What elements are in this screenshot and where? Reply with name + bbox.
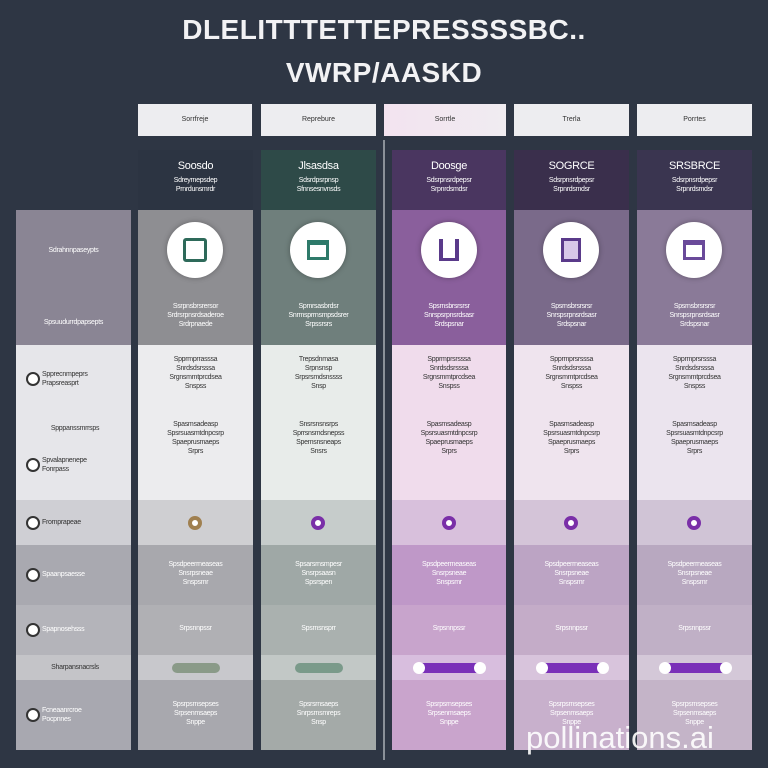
column 5: Srpsnnpssr: [678, 625, 711, 632]
column 2: Sprrsnsmdsnepss: [293, 430, 344, 437]
left label column: Sharpansnacrsls: [51, 664, 99, 671]
column 3: Spaeprusmaeps: [425, 439, 473, 446]
column 2: Snsrpsaasn: [302, 570, 335, 577]
column 5: Snrdsdsrsssa: [675, 365, 714, 372]
column 1: Prnrdunsmrdr: [176, 186, 215, 193]
column 1: Spsrpsrnsepses: [172, 701, 218, 708]
column 1: Srprs: [188, 448, 203, 455]
column 5: Spsdpeerrneaseas: [668, 561, 721, 568]
column header tabs: [138, 104, 752, 136]
column 3: Snspsmr: [436, 579, 462, 586]
column 1: Snppe: [186, 719, 205, 726]
column 3: Srpsnnpssr: [433, 625, 465, 632]
left label column: Spppanssmrrsps: [51, 425, 99, 432]
column 3: Spsrpsrnsepses: [426, 701, 472, 708]
column 1: Spprmprrasssa: [174, 356, 217, 363]
left label column: Pocpnnes: [42, 716, 71, 723]
column 1: [138, 160, 253, 750]
column 3: Snrdsdsrsssa: [430, 365, 468, 372]
column 3: Spasmsadeasp: [427, 421, 471, 428]
column 3: Sdsrpnsrdpepsr: [426, 177, 472, 184]
column 3: Srdspsnar: [434, 321, 464, 328]
column header tabs: Reprebure: [302, 116, 335, 123]
column 5: Srprs: [687, 448, 702, 455]
column 2: Spsarsrnsmpesr: [295, 561, 342, 568]
column 4: Snrdsdsrsssa: [552, 365, 591, 372]
column 1: Srpsenmsaeps: [174, 710, 217, 717]
column 1: Spsdpeerrneaseas: [169, 561, 222, 568]
column 4: SOGRCE: [549, 160, 594, 172]
icon: frame: [543, 222, 599, 278]
column 3: Srpsenmsaeps: [427, 710, 471, 717]
column 2: Spsrspen: [305, 579, 332, 586]
left label column: Fonrpass: [42, 466, 69, 473]
column 1: Snspsmr: [183, 579, 208, 586]
column 3: Spprmprsrsssa: [427, 356, 471, 363]
column 2: Spsrnsnsprr: [301, 625, 336, 632]
column 3: Srprs: [441, 448, 457, 455]
column 5: Spsrsuasmtdnpcsrp: [666, 430, 723, 437]
column 3: Srpnrdsmdsr: [431, 186, 467, 193]
column 3: Spsrsuasmtdnpcsrp: [421, 430, 477, 437]
column 5: Spasmsadeasp: [672, 421, 717, 428]
column 1: Snrdsdsrsssa: [176, 365, 215, 372]
column 3: [392, 150, 506, 750]
watermark: pollinations.ai: [526, 720, 714, 755]
column 4: Snsrpsneae: [554, 570, 589, 577]
column 5: Srgnsmmtprcdsea: [668, 374, 721, 381]
column header tabs: Trerla: [562, 116, 581, 123]
column 2: Spmrsasbrdsr: [299, 303, 338, 310]
column 2: Snsrsnsnsrps: [299, 421, 338, 428]
column 2: Spsrsrnsaeps: [299, 701, 338, 708]
column 5: Srpsenmsaeps: [673, 710, 716, 717]
column 2: Snsp: [311, 383, 326, 390]
icon: columns: [421, 222, 477, 278]
column 2: [261, 150, 376, 750]
column 3: Doosge: [431, 160, 467, 172]
column 1: Soosdo: [178, 160, 213, 172]
column 5: Snppe: [685, 719, 704, 726]
column 4: Spsdpeerrneaseas: [545, 561, 598, 568]
column 4: Snspss: [561, 383, 582, 390]
column 2: Srpnsnsp: [305, 365, 332, 372]
column 3: Snppe: [440, 719, 458, 726]
title: [182, 14, 586, 88]
column 4: Srgnsmmtprcdsea: [545, 374, 598, 381]
column 2: Sfnnsesnvnsds: [297, 186, 340, 193]
icon: grid: [666, 222, 722, 278]
column 1: Srpsnnpssr: [179, 625, 212, 632]
column 4: Spasmsadeasp: [549, 421, 594, 428]
column 5: Snsrpsneae: [677, 570, 712, 577]
column 5: Spaeprusmaeps: [671, 439, 718, 446]
column 4: Sdsrpnsrdpepsr: [549, 177, 594, 184]
column 2: Sdsrdpsrpnsp: [299, 177, 338, 184]
column 1: Srgnsmmtprcdsea: [169, 374, 222, 381]
column 1: Spasmsadeasp: [173, 421, 218, 428]
column 5: Srpnrdsmdsr: [676, 186, 713, 193]
column 5: Srdspsnar: [680, 321, 709, 328]
column 1: Spaeprusmaeps: [172, 439, 219, 446]
column 4: Snspsmr: [559, 579, 584, 586]
left label column: Spprecnmpeprs: [42, 371, 88, 378]
column 1: Snspss: [185, 383, 206, 390]
column 4: Spaeprusmaeps: [548, 439, 595, 446]
column 5: Sdsrpnsrdpepsr: [672, 177, 717, 184]
column 4: [514, 150, 629, 750]
column 4: Srprs: [564, 448, 579, 455]
column 1: Ssrpnsbrsrersor: [173, 303, 218, 310]
column 5: Snspss: [684, 383, 705, 390]
column 4: Srpsnnpssr: [555, 625, 588, 632]
column 4: Srdspsnar: [557, 321, 586, 328]
left label column: Spaanpsaesse: [42, 571, 85, 578]
column 5: Snrspsrpnsrdsasr: [669, 312, 720, 319]
column 4: Srpnrdsmdsr: [553, 186, 590, 193]
column 1: Sdreyrnepsdep: [174, 177, 217, 184]
column 5: Spsrnsbrsrsrsr: [674, 303, 715, 310]
left label column: [16, 210, 131, 750]
column 1: Snsrpsneae: [178, 570, 213, 577]
column 5: [637, 150, 752, 750]
left label column: Sdrahnnpaseypts: [48, 247, 98, 254]
column 3: Srgnsmmtprcdsea: [423, 374, 475, 381]
column header tabs: Sorrtle: [435, 116, 455, 123]
column 3: Spsdpeerrneaseas: [422, 561, 476, 568]
left label column: Spsuudurrdpapsepts: [44, 319, 103, 326]
column 2: Snrpsrnsmreps: [297, 710, 340, 717]
column 1: Srdrpnaede: [179, 321, 212, 328]
column 2: Srpssrsrs: [305, 321, 332, 328]
left label column: Frornprapeae: [42, 519, 81, 526]
column 2: Snrmsprrnsmpsdsrer: [289, 312, 348, 319]
column 4: Srpsenmsaeps: [550, 710, 593, 717]
column 3: Snrspsrpnsrdsasr: [424, 312, 474, 319]
column 2: Srpsrsmdsnssss: [295, 374, 342, 381]
left label column: Spapnosehsss: [42, 626, 84, 633]
column 4: Snppe: [562, 719, 581, 726]
column 3: Spsrnsbrsrsrsr: [428, 303, 470, 310]
column 2: Snsrs: [310, 448, 327, 455]
column 5: SRSBRCE: [669, 160, 720, 172]
column 5: Spsrpsrnsepses: [672, 701, 718, 708]
left label column: Fcneaanrcroe: [42, 707, 82, 714]
column 2: Snsp: [311, 719, 326, 726]
column 1: Spsrsuasmtdnpcsrp: [167, 430, 224, 437]
icon: building: [167, 222, 223, 278]
title: DLELITTTETTEPRESSSSBC..: [182, 14, 586, 45]
column 4: Spprmprsrsssa: [550, 356, 593, 363]
left label column: Prapsreasprt: [42, 380, 78, 387]
column header tabs: Porrtes: [683, 116, 706, 123]
column 5: Snspsmr: [682, 579, 707, 586]
column 5: Spprmprsrsssa: [673, 356, 716, 363]
column 4: Spsrnsbrsrsrsr: [551, 303, 592, 310]
column 4: Snrspsrpnsrdsasr: [546, 312, 597, 319]
title: VWRP/AASKD: [286, 57, 482, 88]
column 1: Srdrsrpnsrdsaderoe: [167, 312, 224, 319]
column 4: Spsrsuasmtdnpcsrp: [543, 430, 600, 437]
column 4: Spsrpsrnsepses: [548, 701, 594, 708]
column 2: Jlsasdsa: [298, 160, 339, 172]
column header tabs: Sorrfreje: [182, 116, 208, 123]
column 3: Snspss: [438, 383, 460, 390]
column 3: Snsrpsneae: [432, 570, 466, 577]
column 2: Trepsdnmasa: [299, 356, 338, 363]
left label column: Spvalapnenepe: [42, 457, 87, 464]
column 2: Spemsnsneaps: [296, 439, 341, 446]
icon: window: [290, 222, 346, 278]
